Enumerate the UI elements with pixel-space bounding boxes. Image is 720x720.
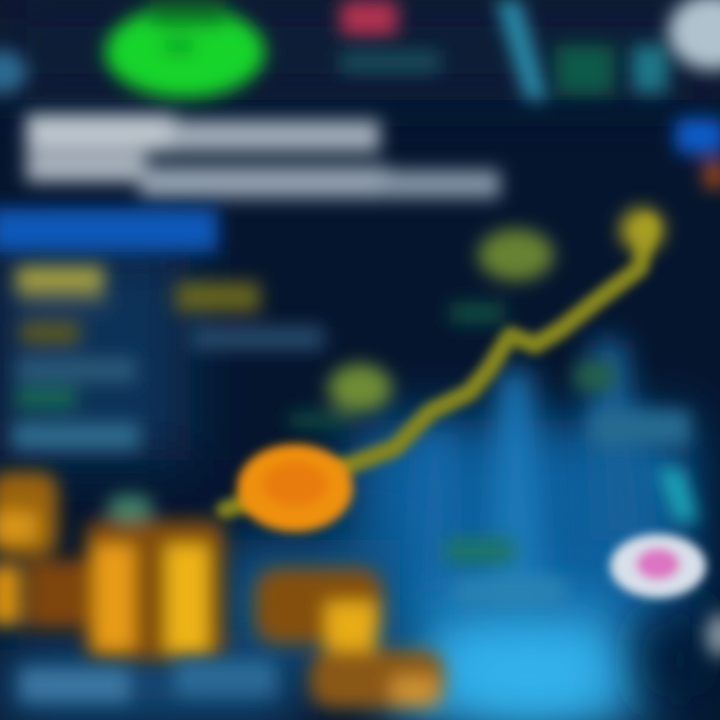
icon: pink badge: [340, 0, 398, 36]
coin stacks left: [0, 472, 225, 660]
caption under pink badge: [340, 50, 440, 74]
cyan diagonal lower right: [658, 468, 698, 522]
text column: left: [12, 266, 140, 450]
bottom right dark icon: [706, 613, 720, 657]
top banner images: [0, 0, 720, 100]
title: [26, 114, 500, 198]
centre lower text: [445, 538, 565, 606]
right text: [575, 362, 690, 446]
text column: middle: [176, 282, 324, 350]
teal bar: [632, 45, 668, 93]
icon: white and pink oval: [610, 534, 706, 598]
bottom-left labels: [20, 660, 275, 702]
coin stacks right: [255, 568, 445, 708]
white glow top right: [668, 0, 720, 70]
callout: upper label: [450, 229, 554, 324]
large orange coin: [237, 444, 353, 532]
growth line chart: [225, 208, 664, 510]
subtitle bar: [0, 208, 218, 252]
callout: lower label: [290, 364, 392, 428]
blue left icon: [0, 50, 27, 94]
cyan diagonal beam: [496, 0, 548, 100]
top right blue and orange icon: [675, 118, 720, 188]
icon: green blob: [105, 0, 265, 98]
dark green bar: [555, 45, 615, 95]
top point: [620, 208, 664, 252]
